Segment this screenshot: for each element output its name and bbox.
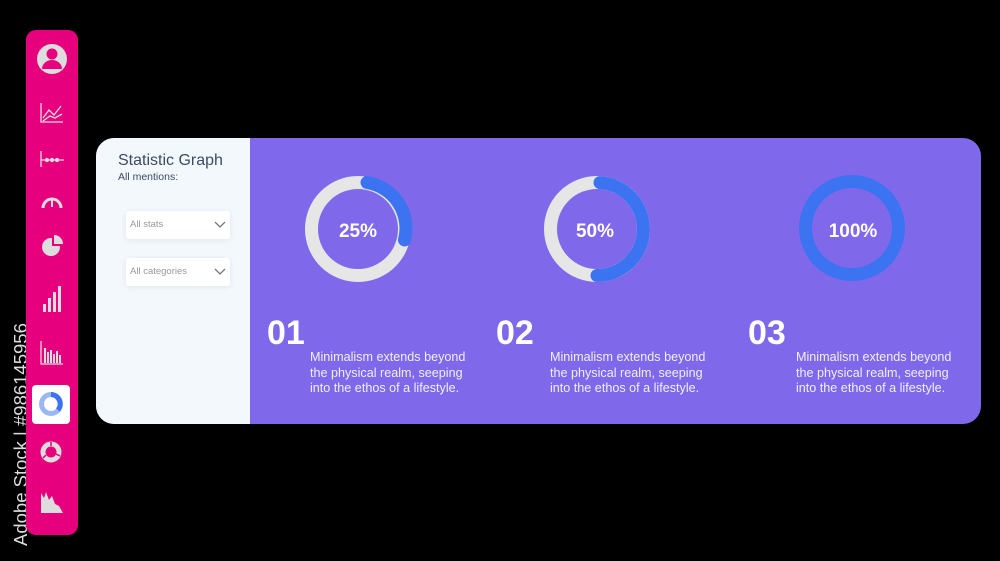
icon: bar chart — [43, 286, 61, 312]
icon: line chart — [41, 103, 63, 122]
step 02 text: Minimalism extends beyond the physical realm, seeping into the ethos of a lifestyle. — [550, 350, 705, 395]
dropdown: all categories: All categories — [130, 266, 187, 277]
panel: filter side — [96, 138, 250, 424]
step 02 number: 02 — [496, 314, 534, 352]
icon: dot line — [41, 151, 64, 167]
donut 25%: 25% — [339, 221, 377, 242]
donut 25% — [312, 182, 406, 276]
icon: ring — [43, 442, 60, 460]
icon: histogram — [41, 341, 63, 364]
step 01 number: 01 — [267, 314, 305, 352]
icon: pie — [42, 235, 63, 256]
main panel — [96, 138, 981, 424]
step 03 text: Minimalism extends beyond the physical realm, seeping into the ethos of a lifestyle. — [796, 350, 951, 395]
step 03 number: 03 — [748, 314, 786, 352]
icon: gauge — [43, 199, 61, 208]
title: Statistic Graph — [118, 152, 223, 169]
icon: area chart — [41, 492, 63, 513]
donut 100% — [806, 182, 898, 274]
dropdown: all stats — [126, 211, 230, 239]
donut 50% — [550, 182, 644, 276]
icon: active donut — [32, 385, 70, 424]
icon: user avatar — [37, 44, 67, 74]
sidebar — [26, 30, 78, 535]
donut 50%: 50% — [576, 221, 614, 242]
dropdown: all stats: All stats — [130, 219, 163, 230]
dropdown: all categories — [126, 258, 230, 286]
step 01 text: Minimalism extends beyond the physical realm, seeping into the ethos of a lifestyle. — [310, 350, 465, 395]
donut 100%: 100% — [829, 221, 877, 242]
subtitle: All mentions: — [118, 171, 178, 183]
watermark id text: Adobe Stock | #986145956 — [10, 323, 31, 546]
